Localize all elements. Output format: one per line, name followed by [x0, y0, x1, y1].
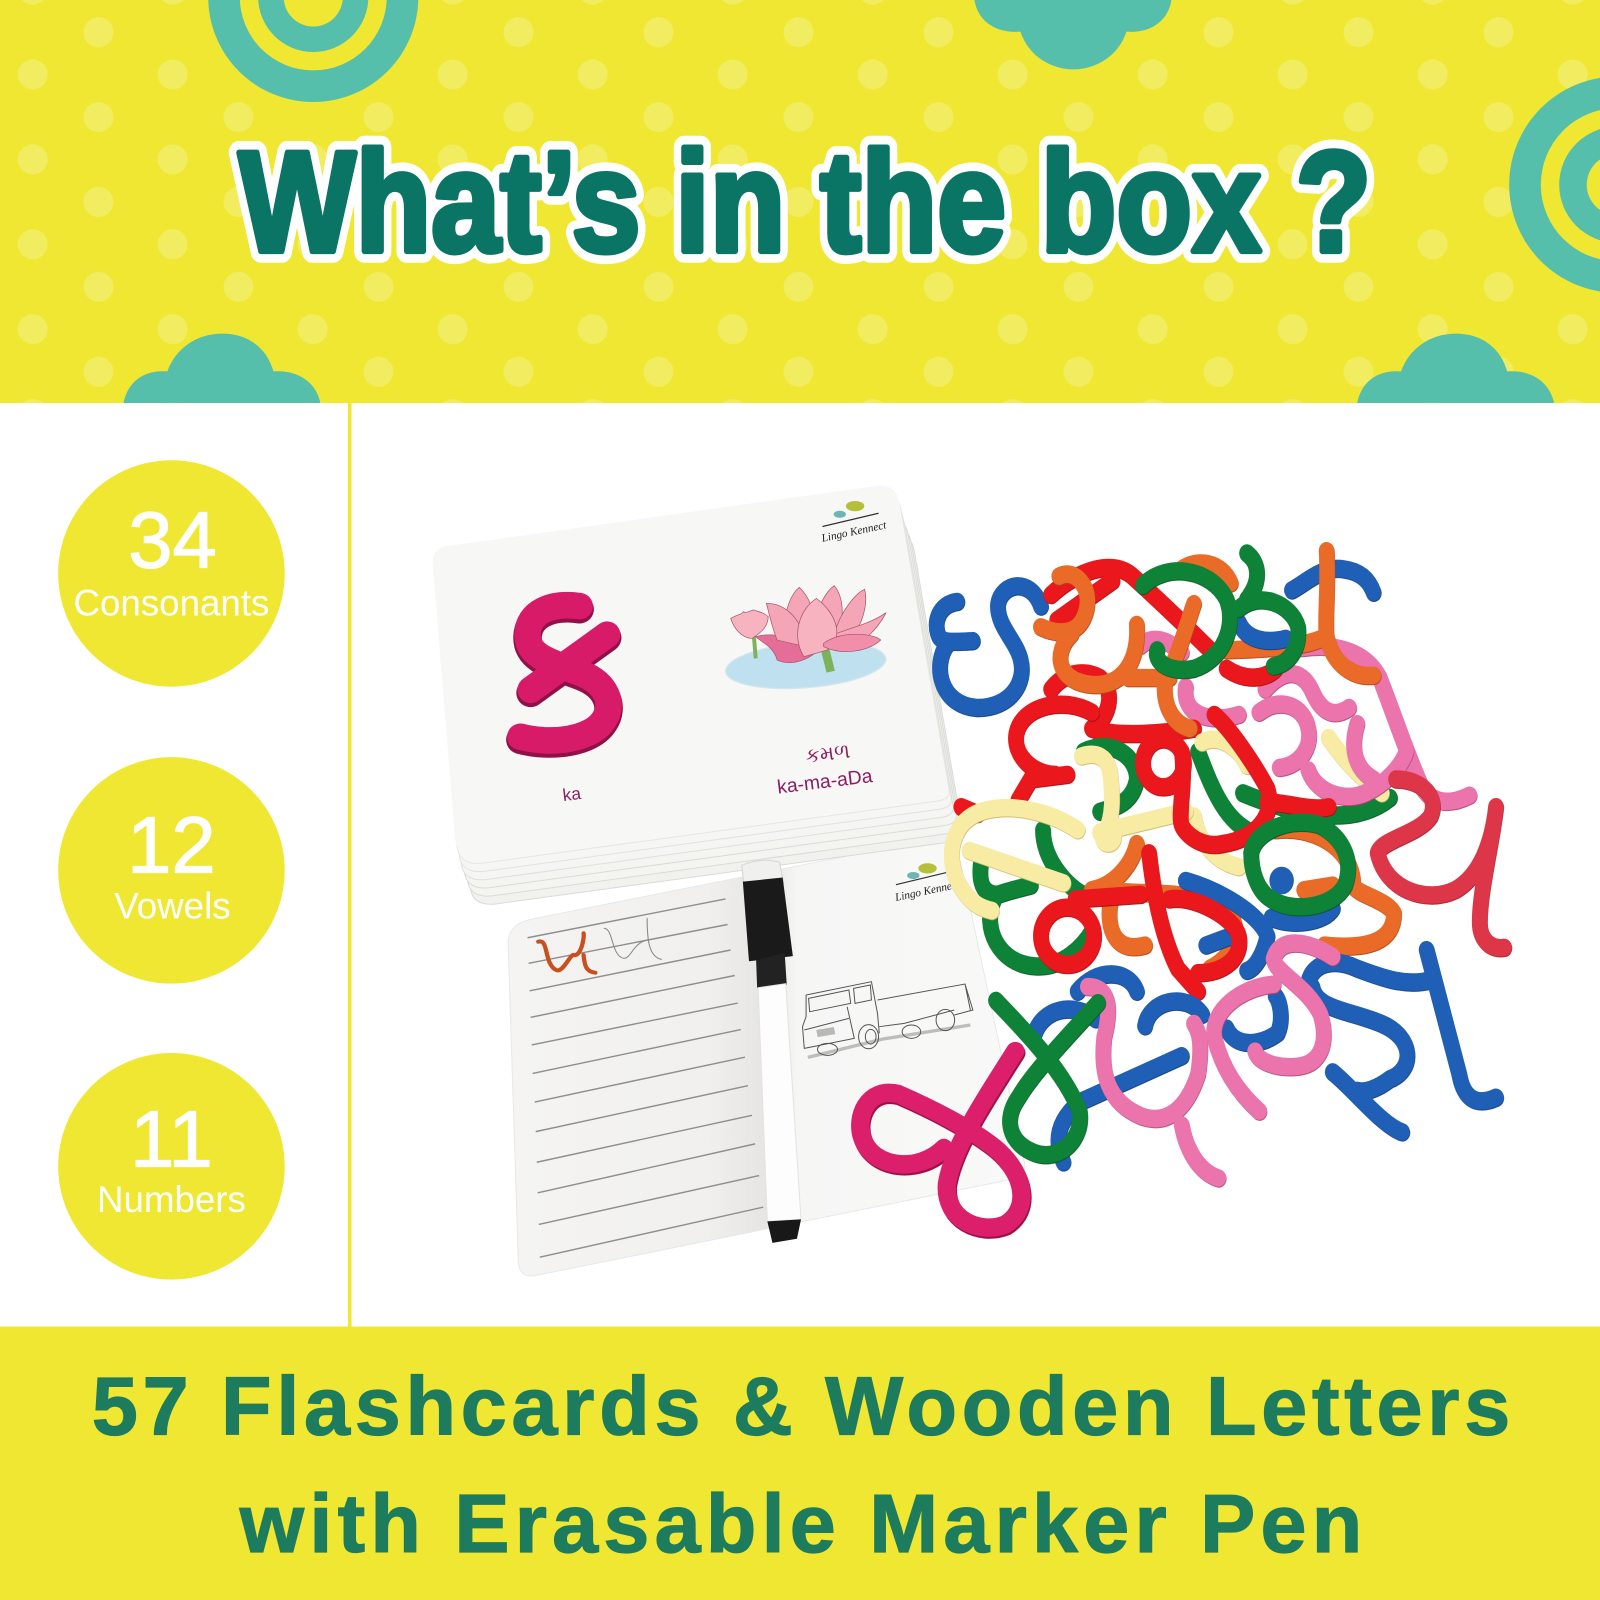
- wooden letter: pink tall: [1265, 646, 1469, 801]
- letter ka: [520, 605, 609, 744]
- card captions: ka: [561, 783, 582, 805]
- title: What’s in the box ?: [239, 123, 1371, 282]
- wooden letter: pink bottom: [1088, 987, 1218, 1178]
- wooden letter: orange tall: [1182, 551, 1373, 676]
- stat: 11 numbers: 11: [130, 1094, 213, 1183]
- stat: 12 vowels: [58, 757, 285, 984]
- decoration: bottom left cloud: [123, 334, 320, 403]
- wooden letter: magenta loop on card: [860, 1051, 1021, 1228]
- wooden letter: orange center: [1092, 829, 1394, 968]
- vertical divider: [348, 403, 352, 1327]
- wooden letter: blue center: [1186, 881, 1333, 970]
- wooden letter: cream back: [1194, 738, 1382, 867]
- decoration: right concentric arcs: [1509, 77, 1600, 293]
- wooden letter: blue long right: [1308, 950, 1496, 1132]
- ruled lines: [528, 899, 763, 1257]
- stat: 34 consonants: 34: [128, 495, 217, 584]
- decoration: top cloud: [974, 0, 1171, 69]
- wooden letter: green left: [980, 830, 1092, 966]
- flashcard stack: ka-ma-aDa: [776, 765, 874, 799]
- stat: 12 vowels: 12: [127, 800, 216, 889]
- stat: 11 numbers: Numbers: [97, 1179, 246, 1220]
- header banner: [0, 0, 1600, 403]
- wooden letter: cream small: [1082, 754, 1186, 845]
- wooden letter: blue far left: [936, 586, 1041, 708]
- tracing letter: [538, 918, 661, 973]
- writing board card: [508, 836, 1025, 1276]
- wooden letter: blue dot: [1269, 867, 1294, 894]
- flashcard stack: [433, 486, 963, 904]
- flashcard stack: કમળ: [804, 741, 851, 768]
- wooden letters pile: [936, 551, 1504, 1178]
- wooden letter: red top: [1051, 568, 1210, 650]
- wooden letter: green ring: [1251, 822, 1348, 907]
- logo on board: Lingo Kennect: [893, 878, 962, 904]
- footer line 2: with Erasable Marker Pen: [239, 1477, 1362, 1570]
- wooden letter: green cross: [996, 1000, 1098, 1155]
- stat: 11 numbers: [58, 1053, 285, 1280]
- wooden letter: green middle: [1084, 747, 1390, 830]
- wooden letter: red nine: [1143, 714, 1329, 845]
- wooden letter: blue bottom: [1035, 974, 1281, 1162]
- decoration: top concentric arcs: [208, 0, 418, 102]
- logo on board: [893, 863, 962, 904]
- wooden letter: pink big right: [1214, 943, 1333, 1111]
- footer banner: [0, 1327, 1600, 1600]
- wooden letter: crimson right: [1378, 779, 1504, 948]
- wooden letter: blue far right top: [1292, 568, 1373, 592]
- marker pen: [742, 860, 801, 1243]
- stat: 34 consonants: Consonants: [73, 582, 269, 623]
- wooden letter: cream big: [952, 808, 1078, 911]
- wooden letter: red left: [961, 704, 1092, 814]
- lotus illustration: [724, 586, 888, 694]
- decoration: bottom right cloud: [1357, 334, 1554, 403]
- wooden letter: red center top: [1051, 668, 1276, 734]
- title: What’s in the box ?: [239, 123, 1371, 282]
- top flashcard: [433, 486, 947, 855]
- wooden letter: blue inner: [1239, 622, 1286, 640]
- footer line 1: 57 Flashcards & Wooden Letters: [92, 1360, 1510, 1453]
- stat: 34 consonants: [58, 460, 285, 687]
- truck line drawing: [802, 982, 973, 1057]
- stat: 12 vowels: Vowels: [114, 885, 231, 926]
- logo on flashcard: [820, 501, 888, 545]
- wooden letter: red fish: [1041, 853, 1239, 991]
- logo on flashcard: Lingo Kennect: [820, 519, 888, 545]
- wooden letter: orange left: [1041, 574, 1194, 728]
- wooden letter: green top: [1143, 553, 1298, 670]
- wooden letter: pink center top: [1141, 639, 1239, 718]
- wooden letter: pink right: [1259, 704, 1406, 796]
